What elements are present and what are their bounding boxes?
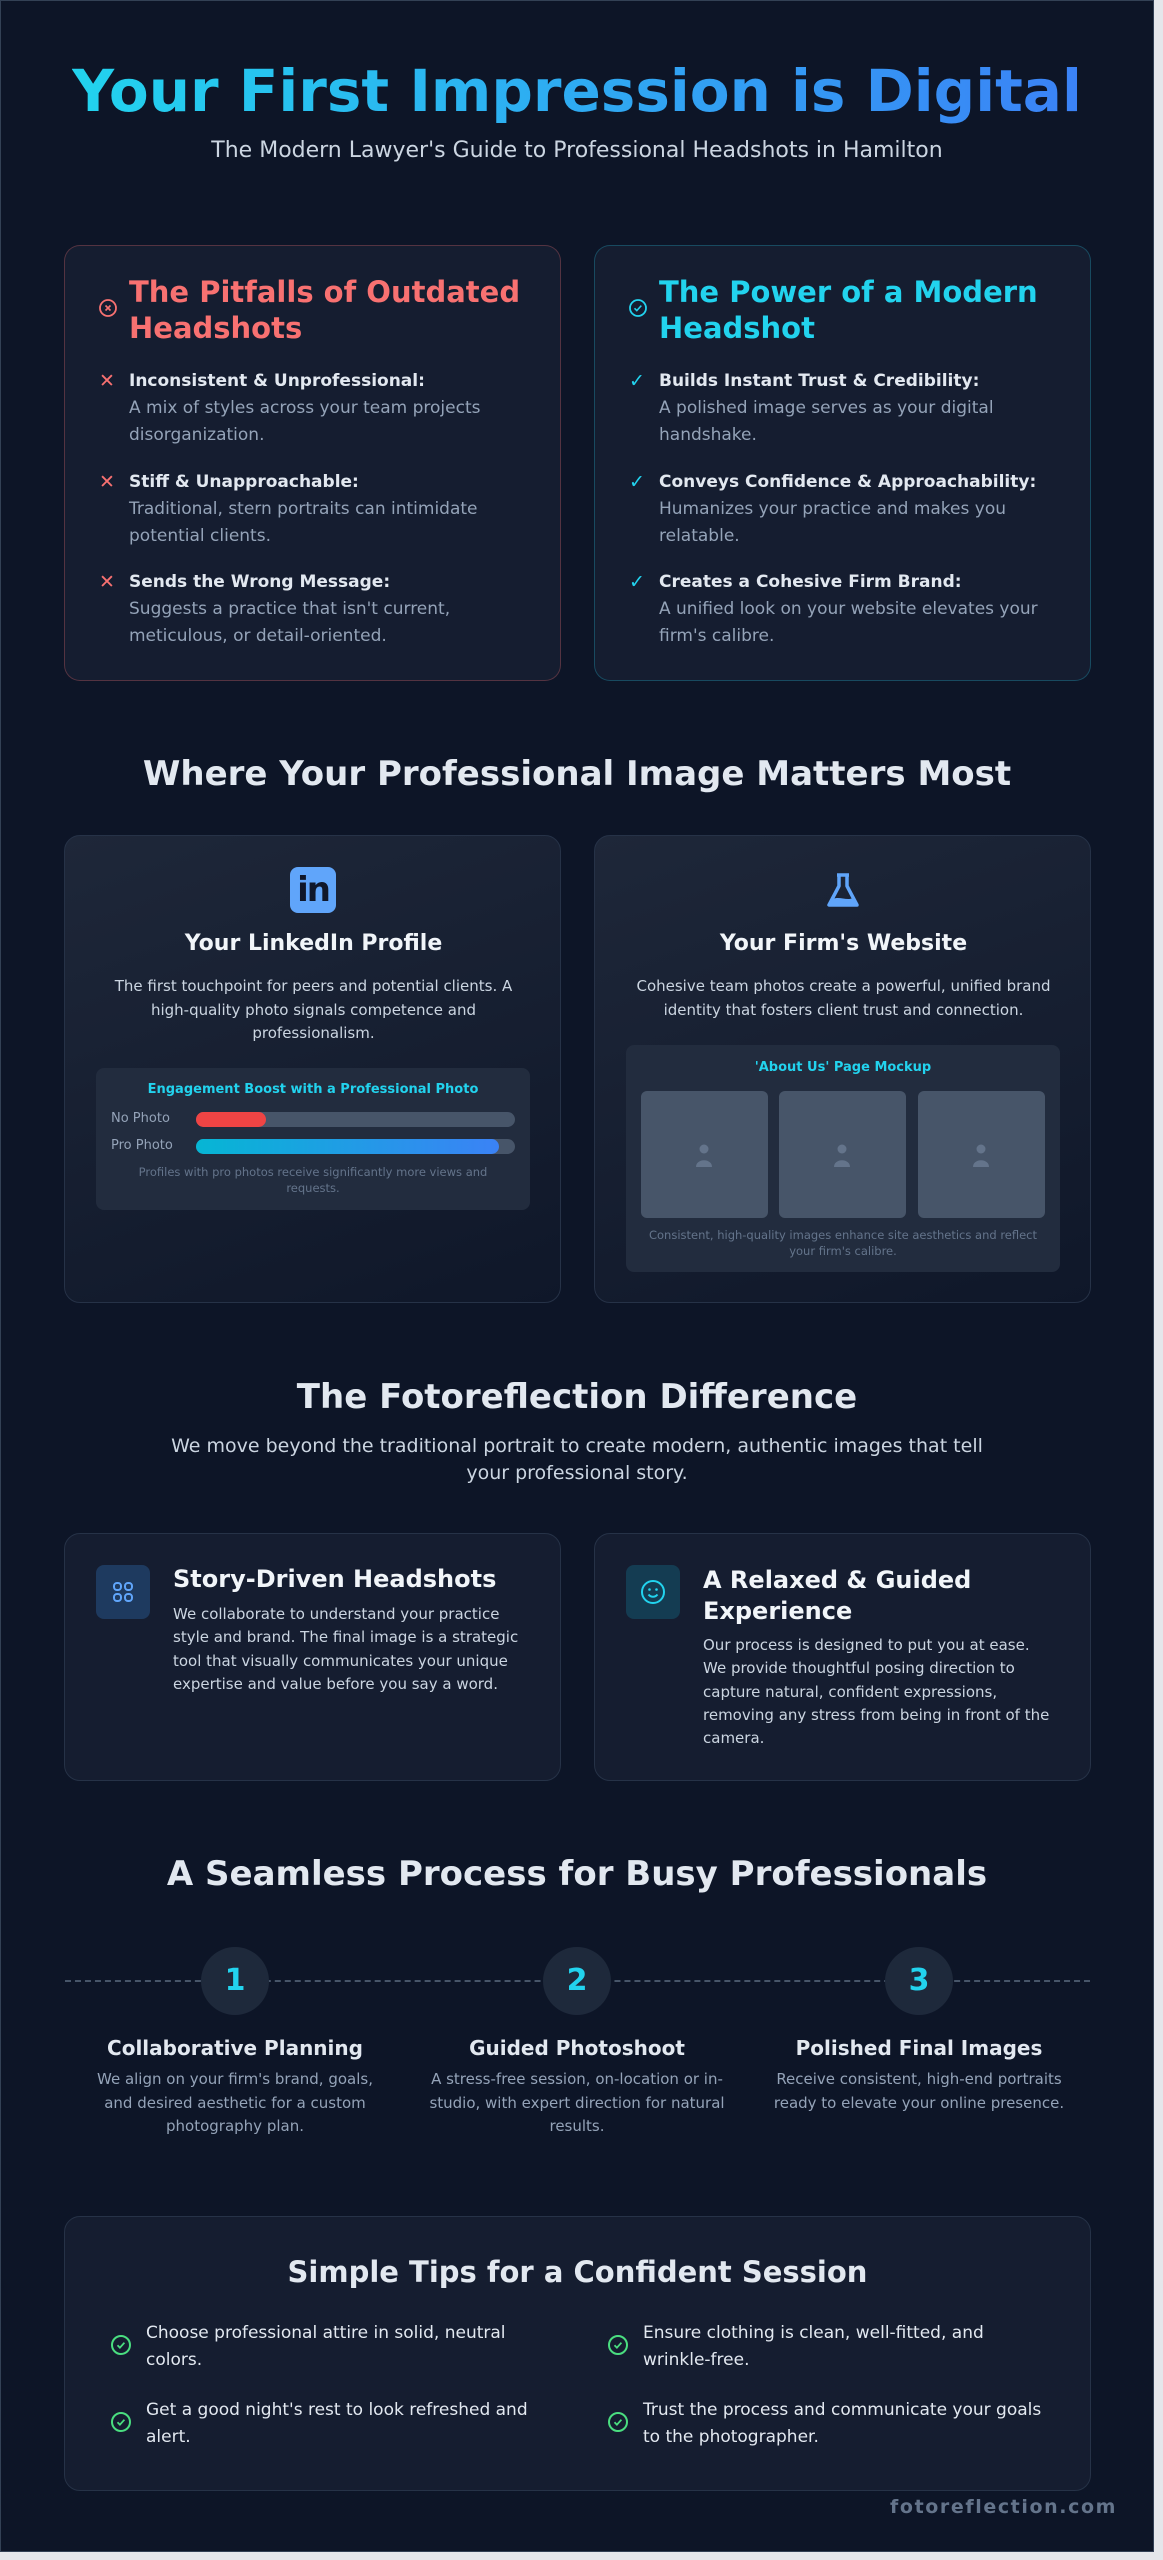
panel: pitfalls: ✕ <box>99 571 115 593</box>
panel: linkedin <box>64 835 561 1303</box>
tip: Trust the process and communicate your goals <box>643 2400 1041 2420</box>
mockup <box>626 1045 1060 1272</box>
item: Traditional, stern portraits can intimidate potential clients. <box>129 499 478 546</box>
heading <box>129 275 520 345</box>
timeline line <box>65 1980 1090 1982</box>
chart: engagement: Engagement Boost with a Professional Photo <box>148 1082 478 1097</box>
tip: Ensure clothing is clean, well-fitted, and <box>643 2323 984 2343</box>
mockup: Consistent, high-quality images enhance site aesthetics and reflect your firm's calibre. <box>649 1228 1037 1258</box>
item: Conveys Confidence & Approachability: <box>659 472 1036 492</box>
step 3: Polished Final Images <box>796 2036 1042 2060</box>
intro text: We move beyond the traditional portrait to create modern, authentic images that tell your professional story. <box>171 1435 983 1484</box>
title: Experience <box>703 1597 852 1625</box>
tip: to the photographer. <box>643 2427 819 2447</box>
item <box>99 571 450 646</box>
desc: The first touchpoint for peers and potential clients. A high-quality photo signals competence and professionalism. <box>115 977 512 1042</box>
step 2 circle <box>543 1947 611 2015</box>
step 1: Collaborative Planning <box>107 2036 363 2060</box>
title: Your LinkedIn Profile <box>185 931 442 956</box>
item: Suggests a practice that isn't current, meticulous, or detail-oriented. <box>129 599 450 646</box>
mockup: 'About Us' Page Mockup <box>755 1060 931 1075</box>
desc: We collaborate to understand your practice style and brand. The final image is a strategic tool that visually communicates your unique expertise and value before you say a word. <box>173 1605 518 1693</box>
heading: Headshots <box>129 311 302 345</box>
footer brand: fotoreflection.com <box>890 2496 1117 2518</box>
tile <box>779 1091 906 1218</box>
item: Sends the Wrong Message: <box>129 572 390 592</box>
panel: tips <box>64 2216 1091 2491</box>
panel: story-driven <box>64 1533 561 1781</box>
item <box>629 370 994 445</box>
panel: power: ✓ <box>629 471 645 493</box>
title: Your First Impression is Digital <box>72 57 1082 125</box>
item: Stiff & Unapproachable: <box>129 472 359 492</box>
heading: difference: The Fotoreflection Difference <box>297 1377 857 1417</box>
panel: pitfalls: ✕ <box>99 370 115 392</box>
title: A Relaxed & Guided <box>703 1566 971 1594</box>
heading: The Pitfalls of Outdated <box>129 275 520 309</box>
tip <box>608 2323 984 2370</box>
step 3 circle: 3 <box>909 1963 929 1998</box>
item: Creates a Cohesive Firm Brand: <box>659 572 962 592</box>
panel: relaxed <box>594 1533 1091 1781</box>
item: A mix of styles across your team projects disorganization. <box>129 398 480 445</box>
icon: grid <box>96 1565 150 1619</box>
item <box>99 471 478 546</box>
chart: engagement: Profiles with pro photos receive significantly more views and requests. <box>139 1165 487 1195</box>
icon: x circle <box>99 299 117 317</box>
item: A polished image serves as your digital handshake. <box>659 398 994 445</box>
item <box>99 370 480 445</box>
step 2 <box>429 2036 725 2135</box>
chart: engagement: No Photo <box>111 1111 170 1126</box>
icon: smile <box>626 1565 680 1619</box>
step 1 circle: 1 <box>225 1963 245 1998</box>
tile <box>918 1091 1045 1218</box>
step 3: Receive consistent, high-end portraits ready to elevate your online presence. <box>774 2070 1064 2112</box>
item: Inconsistent & Unprofessional: <box>129 371 425 391</box>
icon: linkedin: in <box>297 870 329 910</box>
step 3 circle <box>885 1947 953 2015</box>
icon: check circle <box>629 299 647 317</box>
panel: power: ✓ <box>629 571 645 593</box>
tips heading: Simple Tips for a Confident Session <box>288 2255 867 2289</box>
heading: where: Where Your Professional Image Matters Most <box>143 754 1011 794</box>
heading <box>659 275 1038 345</box>
tip <box>608 2400 1041 2447</box>
panel: power: ✓ <box>629 370 645 392</box>
panel: website <box>594 835 1091 1303</box>
panel: power <box>594 245 1091 681</box>
step 2: Guided Photoshoot <box>469 2036 685 2060</box>
heading: The Power of a Modern <box>659 275 1038 309</box>
tip: wrinkle-free. <box>643 2350 749 2370</box>
panel: pitfalls: ✕ <box>99 471 115 493</box>
tip: Get a good night's rest to look refreshed and alert. <box>146 2400 528 2447</box>
desc: Cohesive team photos create a powerful, unified brand identity that fosters client trust and connection. <box>636 977 1051 1018</box>
chart: engagement <box>96 1068 530 1210</box>
tile <box>641 1091 768 1218</box>
item: A unified look on your website elevates your firm's calibre. <box>659 599 1038 646</box>
item <box>629 471 1036 546</box>
item: Humanizes your practice and makes you relatable. <box>659 499 1006 546</box>
tip: Choose professional attire in solid, neutral colors. <box>146 2323 506 2370</box>
desc: We provide thoughtful posing direction to capture natural, confident expressions, removing any stress from being in front of the camera. <box>703 1659 1049 1747</box>
step 1 <box>97 2036 373 2135</box>
desc: Our process is designed to put you at ease. <box>703 1636 1030 1654</box>
step 2: A stress-free session, on-location or in-studio, with expert direction for natural results. <box>429 2070 725 2135</box>
heading: process: A Seamless Process for Busy Professionals <box>167 1854 987 1894</box>
title: Story-Driven Headshots <box>173 1565 496 1593</box>
item <box>629 571 1038 646</box>
icon: linkedin <box>290 867 336 913</box>
title: Your Firm's Website <box>720 931 967 956</box>
chart: engagement: Pro Photo <box>111 1138 173 1153</box>
panel: pitfalls <box>64 245 561 681</box>
heading: Headshot <box>659 311 815 345</box>
step 2 circle: 2 <box>567 1963 587 1998</box>
subtitle: The Modern Lawyer's Guide to Professional Headshots in Hamilton <box>211 138 943 163</box>
item: Builds Instant Trust & Credibility: <box>659 371 979 391</box>
step 3 <box>774 2036 1064 2112</box>
step 1: We align on your firm's brand, goals, and desired aesthetic for a custom photography plan. <box>97 2070 373 2135</box>
step 1 circle <box>201 1947 269 2015</box>
title <box>703 1566 971 1625</box>
icon: flask <box>827 873 859 907</box>
